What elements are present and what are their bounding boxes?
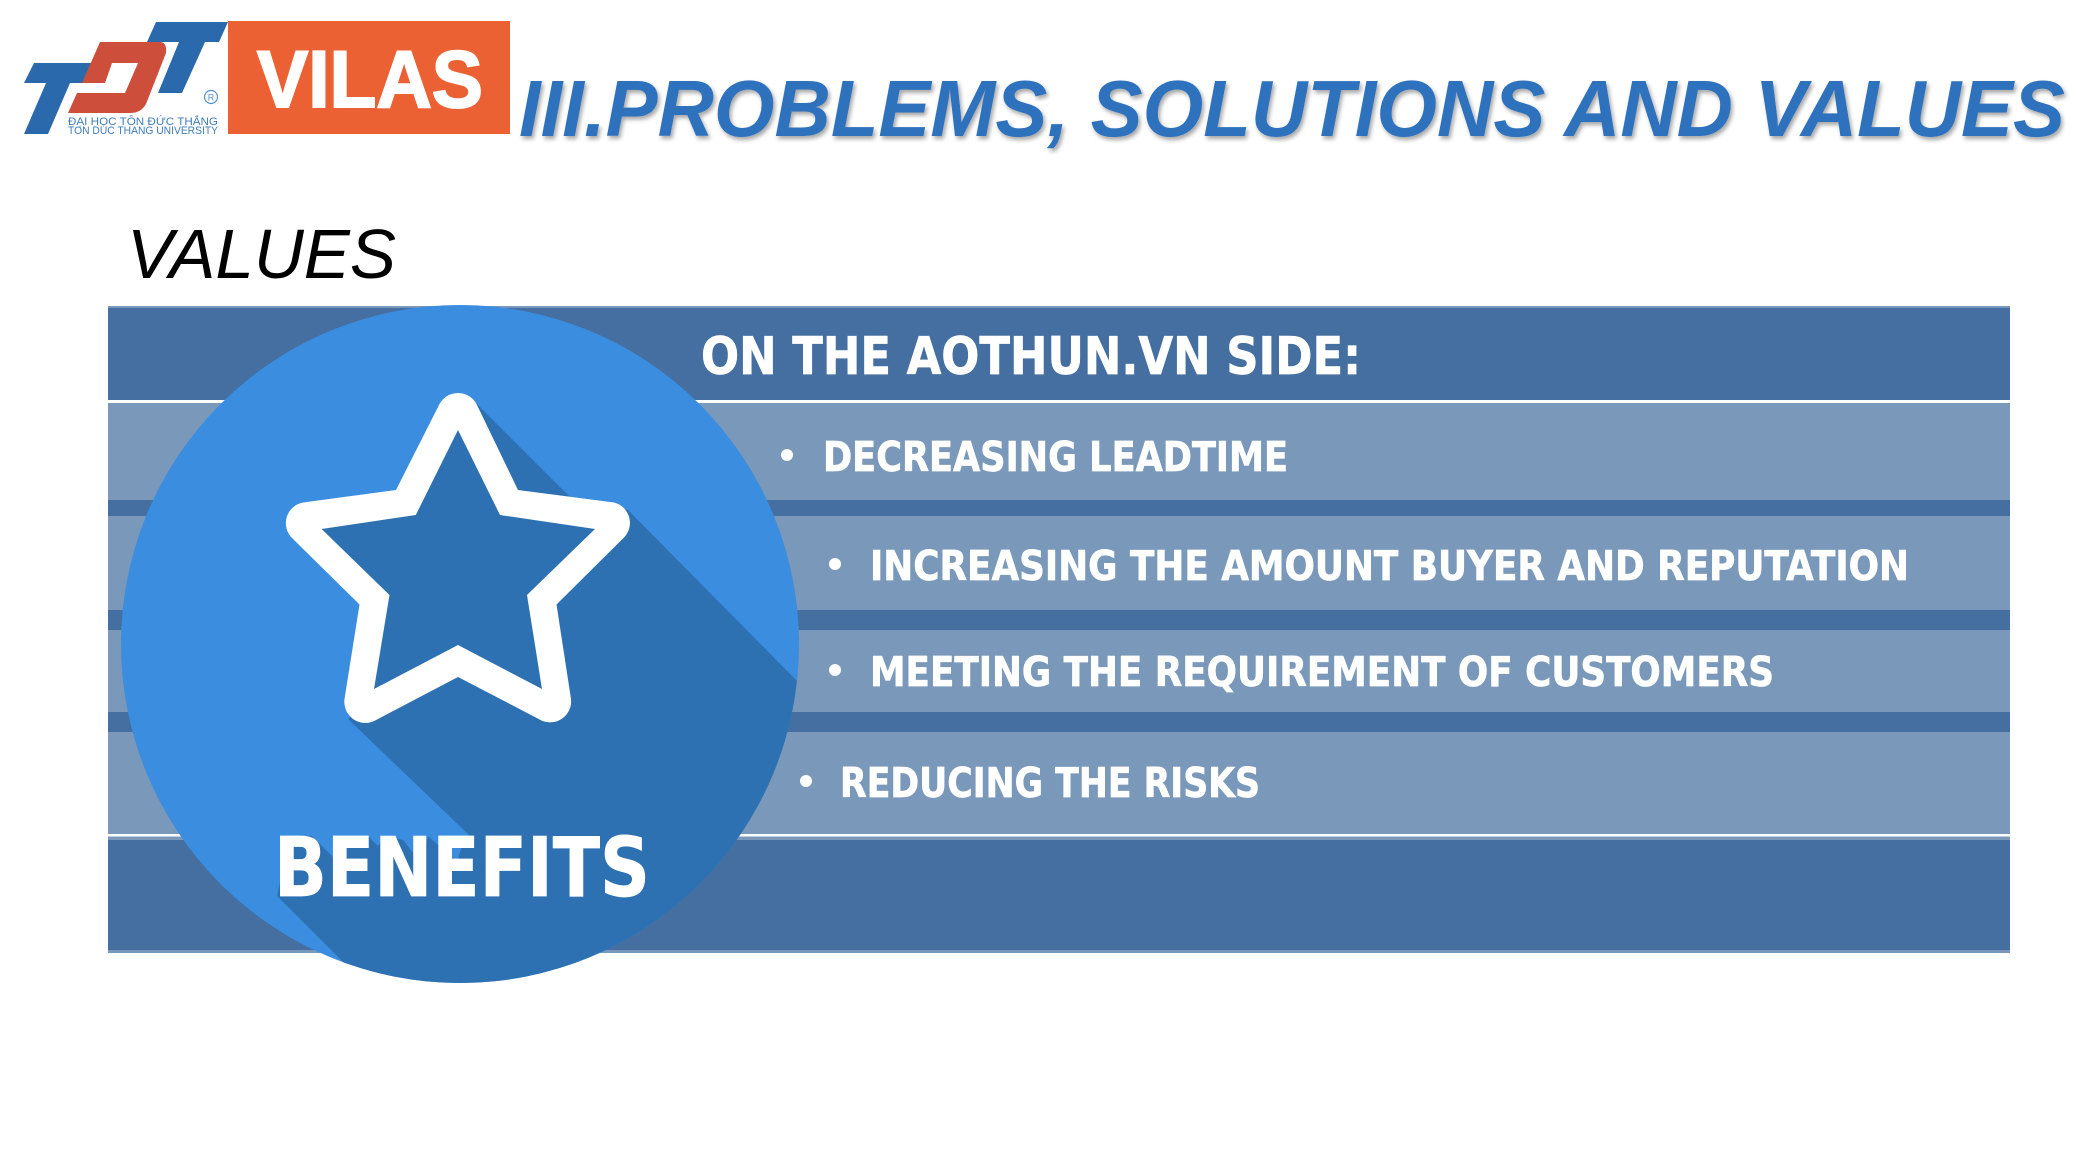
panel: striped background bands (108, 306, 2010, 953)
list item: meeting requirements: MEETING THE REQUIREMENT OF CUSTOMERS (870, 648, 1774, 696)
list item: decreasing leadtime: DECREASING LEADTIME (823, 433, 1288, 481)
heading: on the aothun.vn side: ON THE AOTHUN.VN SIDE: (701, 327, 1361, 387)
logo: TDT university: TON DUC THANG UNIVERSITY (68, 125, 219, 137)
logo: VILAS: VILAS (257, 35, 483, 125)
list item: increasing buyers and reputation: INCREASING THE AMOUNT BUYER AND REPUTATION (870, 542, 1909, 590)
icon: star long shadow (277, 402, 810, 1000)
title: III.PROBLEMS, SOLUTIONS AND VALUES (519, 64, 2065, 153)
logo: VILAS (228, 21, 510, 134)
logo: TDT university: ĐẠI HỌC TÔN ĐỨC THẮNG (68, 115, 218, 128)
badge label: BENEFITS (274, 821, 650, 916)
heading: values: VALUES (127, 215, 396, 293)
logo: TDT university (24, 22, 228, 137)
logo: TDT university: R (208, 92, 215, 102)
icon: star outline (286, 393, 630, 723)
list item: reducing the risks: REDUCING THE RISKS (840, 759, 1260, 807)
icon: benefits badge (121, 305, 810, 1000)
